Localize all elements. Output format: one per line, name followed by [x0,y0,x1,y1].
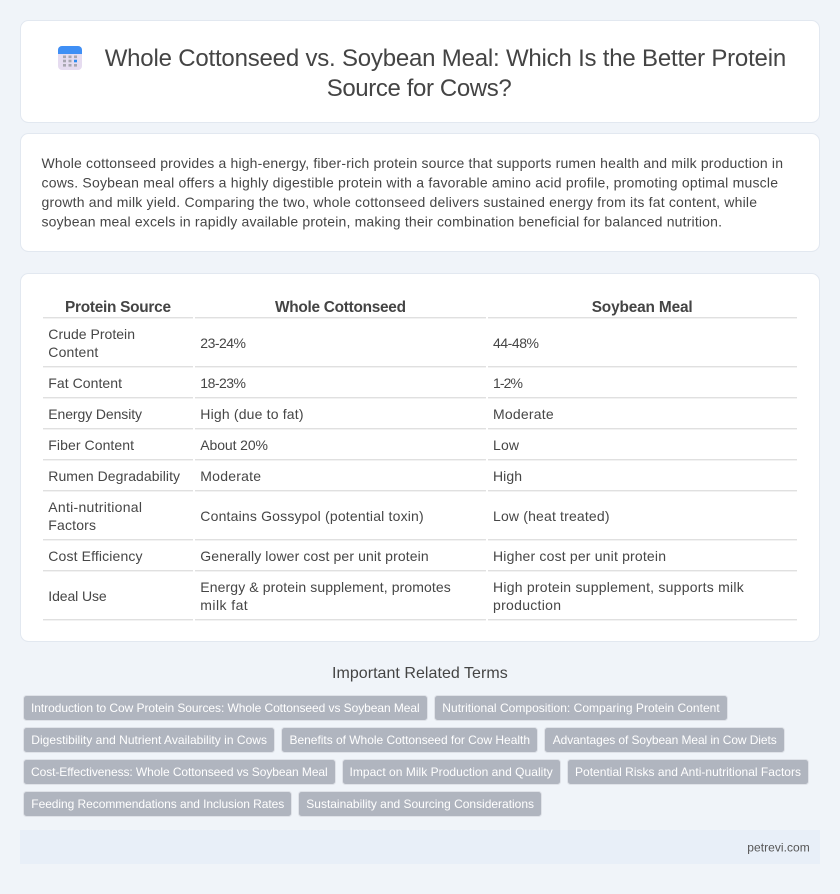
table row: rumen degradability [48,468,522,484]
tag [24,792,292,816]
heading: important related terms: Important Related Terms [332,665,508,682]
table row: anti-nutritional factors: Contains Gossypol (potential toxin) [200,508,424,524]
panel: comparison table [20,274,820,642]
table row: ideal use: production [493,597,561,613]
tag [24,760,336,784]
table row: ideal use [48,579,745,613]
text block: summary [42,155,783,230]
tag: Sustainability and Sourcing Considerations [306,797,534,811]
table row: crude protein: 23-24% [200,335,246,351]
tag [24,696,428,720]
table row: energy density: High (due to fat) [200,406,304,422]
footer source text: petrevi.com [747,840,810,854]
table row: fiber content: About 20% [200,437,268,453]
tag: Potential Risks and Anti-nutritional Factors [575,765,801,779]
table row: anti-nutritional factors: Factors [48,517,96,533]
table row: crude protein [48,326,539,360]
table row: fat content: Fat Content [48,375,122,391]
table row: ideal use: High protein supplement, supports milk [493,579,745,595]
table row: cost efficiency: Cost Efficiency [48,548,142,564]
tag: Nutritional Composition: Comparing Protein Content [442,701,720,715]
table row: cost efficiency: Generally lower cost per unit protein [200,548,429,564]
table header row: Whole Cottonseed [275,299,406,316]
table row: energy density [48,406,554,422]
table row: anti-nutritional factors: Low (heat treated) [493,508,610,524]
text block: summary: soybean meal excels in rapidly available protein, making their combination beneficial for balanced nutrition. [42,214,722,230]
table row: anti-nutritional factors [48,499,610,533]
panel: summary paragraph [20,134,820,252]
table row: crude protein: Content [48,344,98,360]
table row: cost efficiency: Higher cost per unit protein [493,548,666,564]
table row: ideal use: Energy & protein supplement, promotes [200,579,451,595]
title [105,45,786,102]
table row: fiber content: Fiber Content [48,437,134,453]
tag: Advantages of Soybean Meal in Cow Diets [553,733,777,747]
table row: ideal use: milk fat [200,597,248,613]
text block: summary: cows. Soybean meal offers a highly digestible protein with a favorable amino acid profile, promoting optimal muscle [42,174,778,190]
table header row: Protein Source [65,299,171,316]
tag: Feeding Recommendations and Inclusion Rates [31,797,284,811]
table row: ideal use: Ideal Use [48,588,107,604]
table row: fiber content [48,437,520,453]
panel: title header [20,20,820,122]
tag [298,792,542,816]
table row: crude protein: 44-48% [493,335,539,351]
table row: rumen degradability: Rumen Degradability [48,468,180,484]
table row: cost efficiency [48,548,666,564]
title: Source for Cows? [327,75,512,102]
title: Whole Cottonseed vs. Soybean Meal: Which Is the Better Protein [105,45,786,72]
tag [342,760,560,784]
table row: energy density: Energy Density [48,406,142,422]
text block: summary: growth and milk yield. Comparing the two, whole cottonseed delivers sustained energy from its fat content, while [42,194,757,210]
table row: energy density: Moderate [493,406,554,422]
tag [544,728,784,752]
icon: calendar [58,46,82,70]
tag: Benefits of Whole Cottonseed for Cow Health [290,733,530,747]
tag [282,728,538,752]
table row: fat content: 1-2% [493,375,523,391]
related terms tags [24,696,808,816]
tag [568,760,808,784]
tag: Introduction to Cow Protein Sources: Whole Cottonseed vs Soybean Meal [31,701,420,715]
table row: rumen degradability: Moderate [200,468,261,484]
table row: fat content [48,375,523,391]
table header row [65,299,693,316]
table header row: Soybean Meal [592,299,693,316]
table row: fat content: 18-23% [200,375,246,391]
tag: Impact on Milk Production and Quality [350,765,553,779]
tag: Cost-Effectiveness: Whole Cottonseed vs Soybean Meal [31,765,328,779]
footer bar [20,830,820,864]
table row: rumen degradability: High [493,468,522,484]
tag [24,728,274,752]
tag [434,696,728,720]
table row: fiber content: Low [493,437,520,453]
table row: anti-nutritional factors: Anti-nutritional [48,499,142,515]
tag: Digestibility and Nutrient Availability in Cows [31,733,267,747]
text block: summary: Whole cottonseed provides a high-energy, fiber-rich protein source that supports rumen health and milk production in [42,155,783,171]
table row: crude protein: Crude Protein [48,326,135,342]
